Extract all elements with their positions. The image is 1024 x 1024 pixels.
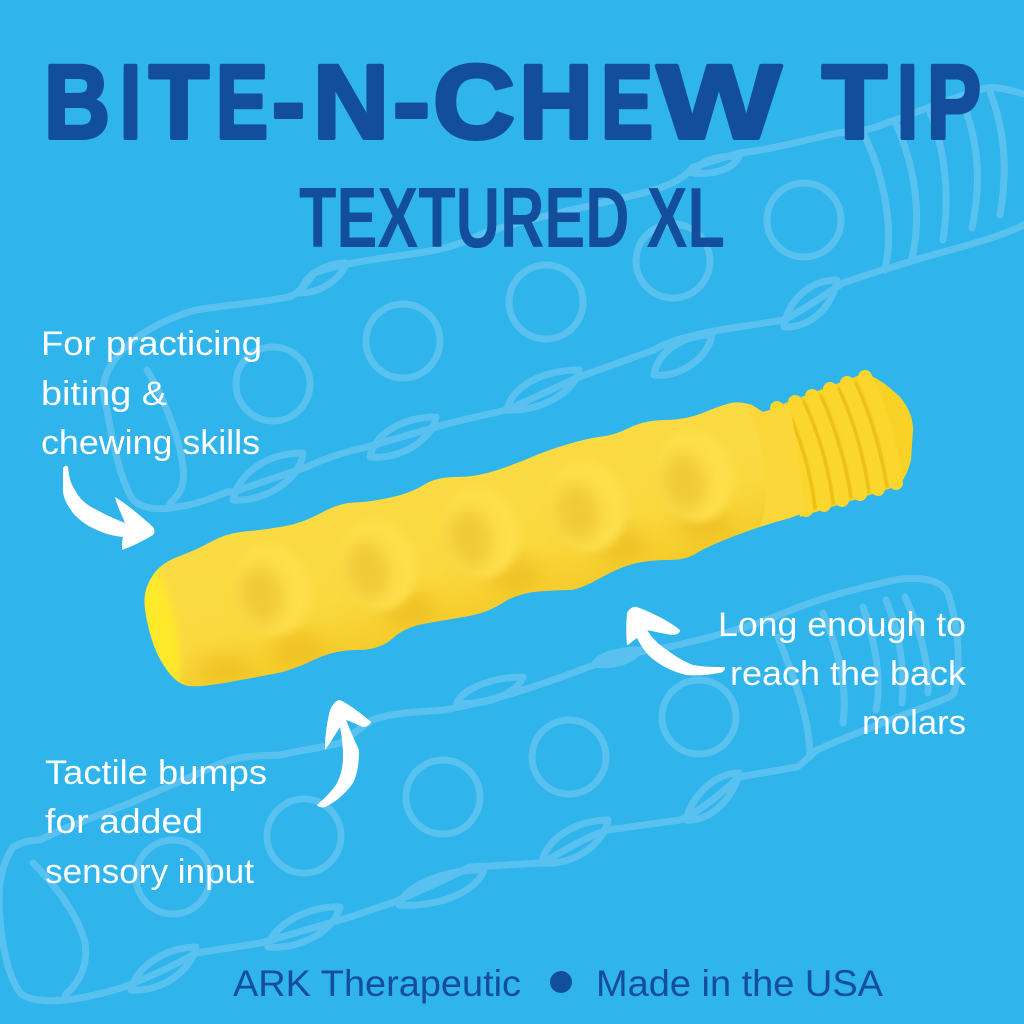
callout: biting and chewing: biting & [41,375,167,413]
lower edge bumps [199,509,731,684]
title: W [657,44,781,161]
callout: long enough [718,606,967,742]
threaded end [772,375,913,517]
footer: ARK Therapeutic [233,963,521,1004]
title: E [601,44,653,161]
arrow: bumps callout [317,700,371,807]
title: I [897,44,918,161]
callout: biting and chewing: For practicing [41,325,262,363]
callout: tactile bumps [45,754,267,891]
callout: long enough: molars [862,704,966,742]
callout: biting and chewing [41,325,262,462]
arrow: molars callout [626,607,725,675]
title: C [433,44,515,161]
callout: tactile bumps: sensory input [45,853,255,891]
callout: long enough: reach the back [730,655,967,693]
title: P [927,44,981,161]
callout: tactile bumps: for added [45,803,203,841]
callout: long enough: Long enough to [718,606,966,644]
body [144,402,806,686]
end cap [144,568,181,684]
arrow: biting callout [63,466,154,550]
callout: biting and chewing: chewing skills [41,424,260,462]
title: B [44,44,110,161]
title: - [393,44,430,161]
tactile bumps [242,435,732,636]
callout: tactile bumps: Tactile bumps [45,754,267,792]
subtitle: TEXTURED XL [299,171,725,266]
footer: Made in the USA [596,963,883,1004]
title: H [519,44,593,161]
title: T [822,44,887,161]
title: N [313,44,389,161]
chew tip product [130,375,913,700]
title: E [216,44,268,161]
title: I [120,44,141,161]
title: - [272,44,305,161]
footer [233,963,883,1004]
background outline: lower chew tip [0,578,958,1001]
collar [745,400,806,528]
title: T [149,44,209,161]
background outline: upper chew tip [103,88,1024,509]
